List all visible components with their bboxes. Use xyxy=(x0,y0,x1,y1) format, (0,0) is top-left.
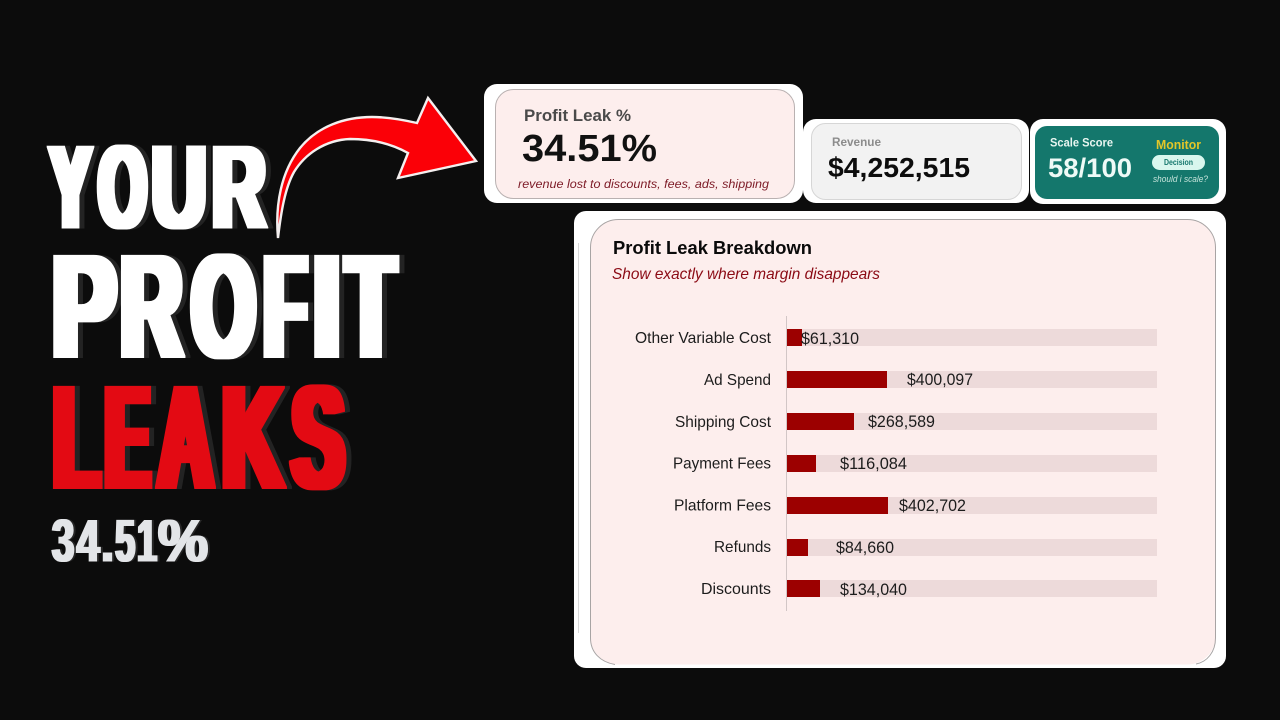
bar chart: leak breakdown by cost xyxy=(635,316,1157,611)
panel heading: Profit Leak Breakdown xyxy=(613,237,812,258)
headline stat: 34.51%: 3 xyxy=(52,508,74,574)
headline stat: 34.51%: 1 xyxy=(137,508,157,574)
headline word: YOUR: O xyxy=(99,121,146,254)
card note: should i scale? xyxy=(1153,174,1208,184)
headline word: PROFIT: P xyxy=(52,225,116,389)
headline word: PROFIT: I xyxy=(313,225,340,389)
headline word: LEAKS: K xyxy=(222,356,282,520)
headline word: LEAKS: E xyxy=(106,356,150,520)
headline stat: 34.51%: 5 xyxy=(115,508,135,574)
headline word: LEAKS: L xyxy=(53,356,99,520)
bar row: Ad Spend: $400,097 xyxy=(907,371,973,389)
pill: Decision xyxy=(1152,155,1205,170)
card label: Revenue xyxy=(832,135,881,149)
bar row: Discounts xyxy=(701,580,1157,599)
headline word: PROFIT: O xyxy=(192,225,255,389)
headline word: LEAKS: S xyxy=(292,356,344,520)
headline word: YOUR: U xyxy=(152,121,206,254)
card value: 34.51% xyxy=(522,128,657,170)
card note: revenue lost to discounts, fees, ads, shipping xyxy=(518,177,769,191)
bar row: Payment Fees: Payment Fees xyxy=(673,456,771,472)
headline word: YOUR: R xyxy=(212,121,265,254)
headline word: LEAKS: A xyxy=(158,356,212,520)
bar row: Shipping Cost: Shipping Cost xyxy=(675,414,772,431)
card label: Scale Score xyxy=(1050,138,1113,150)
arrow: curved red arrow pointing to Profit Leak card xyxy=(277,98,476,238)
headline stat: 34.51%: % xyxy=(158,508,208,574)
card: Scale Score xyxy=(1030,119,1226,204)
headline word: PROFIT: F xyxy=(264,225,306,389)
bar row: Shipping Cost: $268,589 xyxy=(868,413,935,431)
pill: Decision: Decision xyxy=(1164,158,1193,167)
status: Monitor: Monitor xyxy=(1156,137,1201,152)
card: Revenue xyxy=(803,119,1029,203)
bar row: Other Variable Cost: $61,310 xyxy=(801,330,859,348)
bar row: Other Variable Cost xyxy=(635,329,1157,348)
card label: Profit Leak % xyxy=(524,106,631,125)
card: Profit Leak % xyxy=(484,84,803,203)
bar row: Shipping Cost xyxy=(675,413,1157,431)
bar row: Platform Fees: Platform Fees xyxy=(674,498,771,514)
bar row: Platform Fees xyxy=(674,497,1157,515)
bar row: Payment Fees: $116,084 xyxy=(840,455,907,473)
bar row: Discounts: $134,040 xyxy=(840,581,907,599)
headline: YOUR PROFIT LEAKS xyxy=(50,121,395,520)
card value: $4,252,515 xyxy=(828,152,970,183)
bar row: Refunds: $84,660 xyxy=(836,539,894,557)
bar row: Refunds xyxy=(714,539,1157,557)
bar row: Ad Spend xyxy=(704,371,1157,389)
bar row: Other Variable Cost: Other Variable Cost xyxy=(635,330,772,347)
bar row: Payment Fees xyxy=(673,455,1157,473)
panel subtitle: Show exactly where margin disappears xyxy=(612,266,880,283)
bar row: Discounts: Discounts xyxy=(701,581,771,598)
bar row: Ad Spend: Ad Spend xyxy=(704,372,771,389)
panel: Profit Leak Breakdown xyxy=(574,211,1226,668)
card value: 58/100 xyxy=(1048,153,1132,183)
bar row: Refunds: Refunds xyxy=(714,539,771,556)
headline stat: 34.51%: . xyxy=(101,508,114,574)
headline word: PROFIT: R xyxy=(121,225,182,389)
headline word: YOUR: Y xyxy=(50,121,91,254)
headline word: PROFIT: T xyxy=(347,225,395,389)
bar row: Platform Fees: $402,702 xyxy=(899,497,966,515)
headline stat: 34.51%: 4 xyxy=(77,508,100,574)
